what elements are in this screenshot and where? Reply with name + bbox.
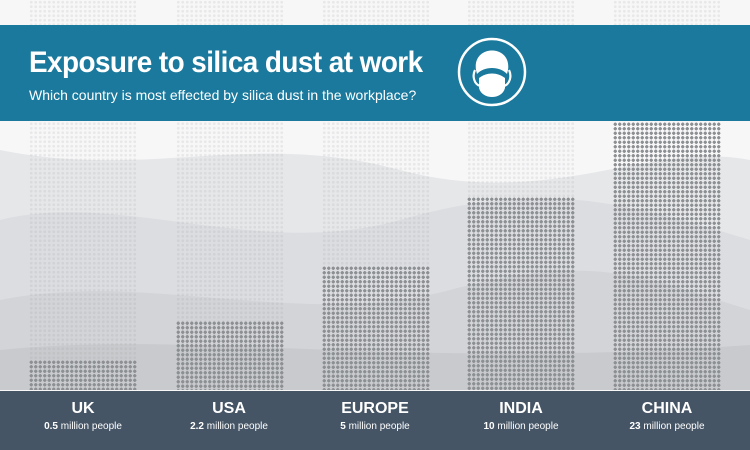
label: UK: UK [71,400,95,417]
bar: China [613,122,721,390]
label: India [483,400,559,432]
label: Europe: EUROPE [341,400,409,417]
label: China: CHINA [642,400,692,417]
label: UK [44,400,122,432]
label: USA: USA [212,400,246,417]
label: USA [190,400,268,432]
footer label band [0,391,750,450]
label: China [629,400,705,432]
bar: Europe [322,266,430,390]
label: Europe: 5 million people [340,421,410,432]
label: India: 10 million people [483,421,559,432]
bar: India [467,197,575,390]
bar: UK [29,360,137,390]
subtitle: Which country is most effected by silica dust in the workplace? [29,87,416,103]
header banner [0,25,750,121]
label: UK: 0.5 million people [44,421,122,432]
bar: USA [176,321,284,390]
label: China: 23 million people [629,421,705,432]
label: Europe [340,400,410,432]
label: USA: 2.2 million people [190,421,268,432]
title: Exposure to silica dust at work [29,46,423,79]
icon: mask face [458,38,526,106]
label: India: INDIA [499,400,543,417]
